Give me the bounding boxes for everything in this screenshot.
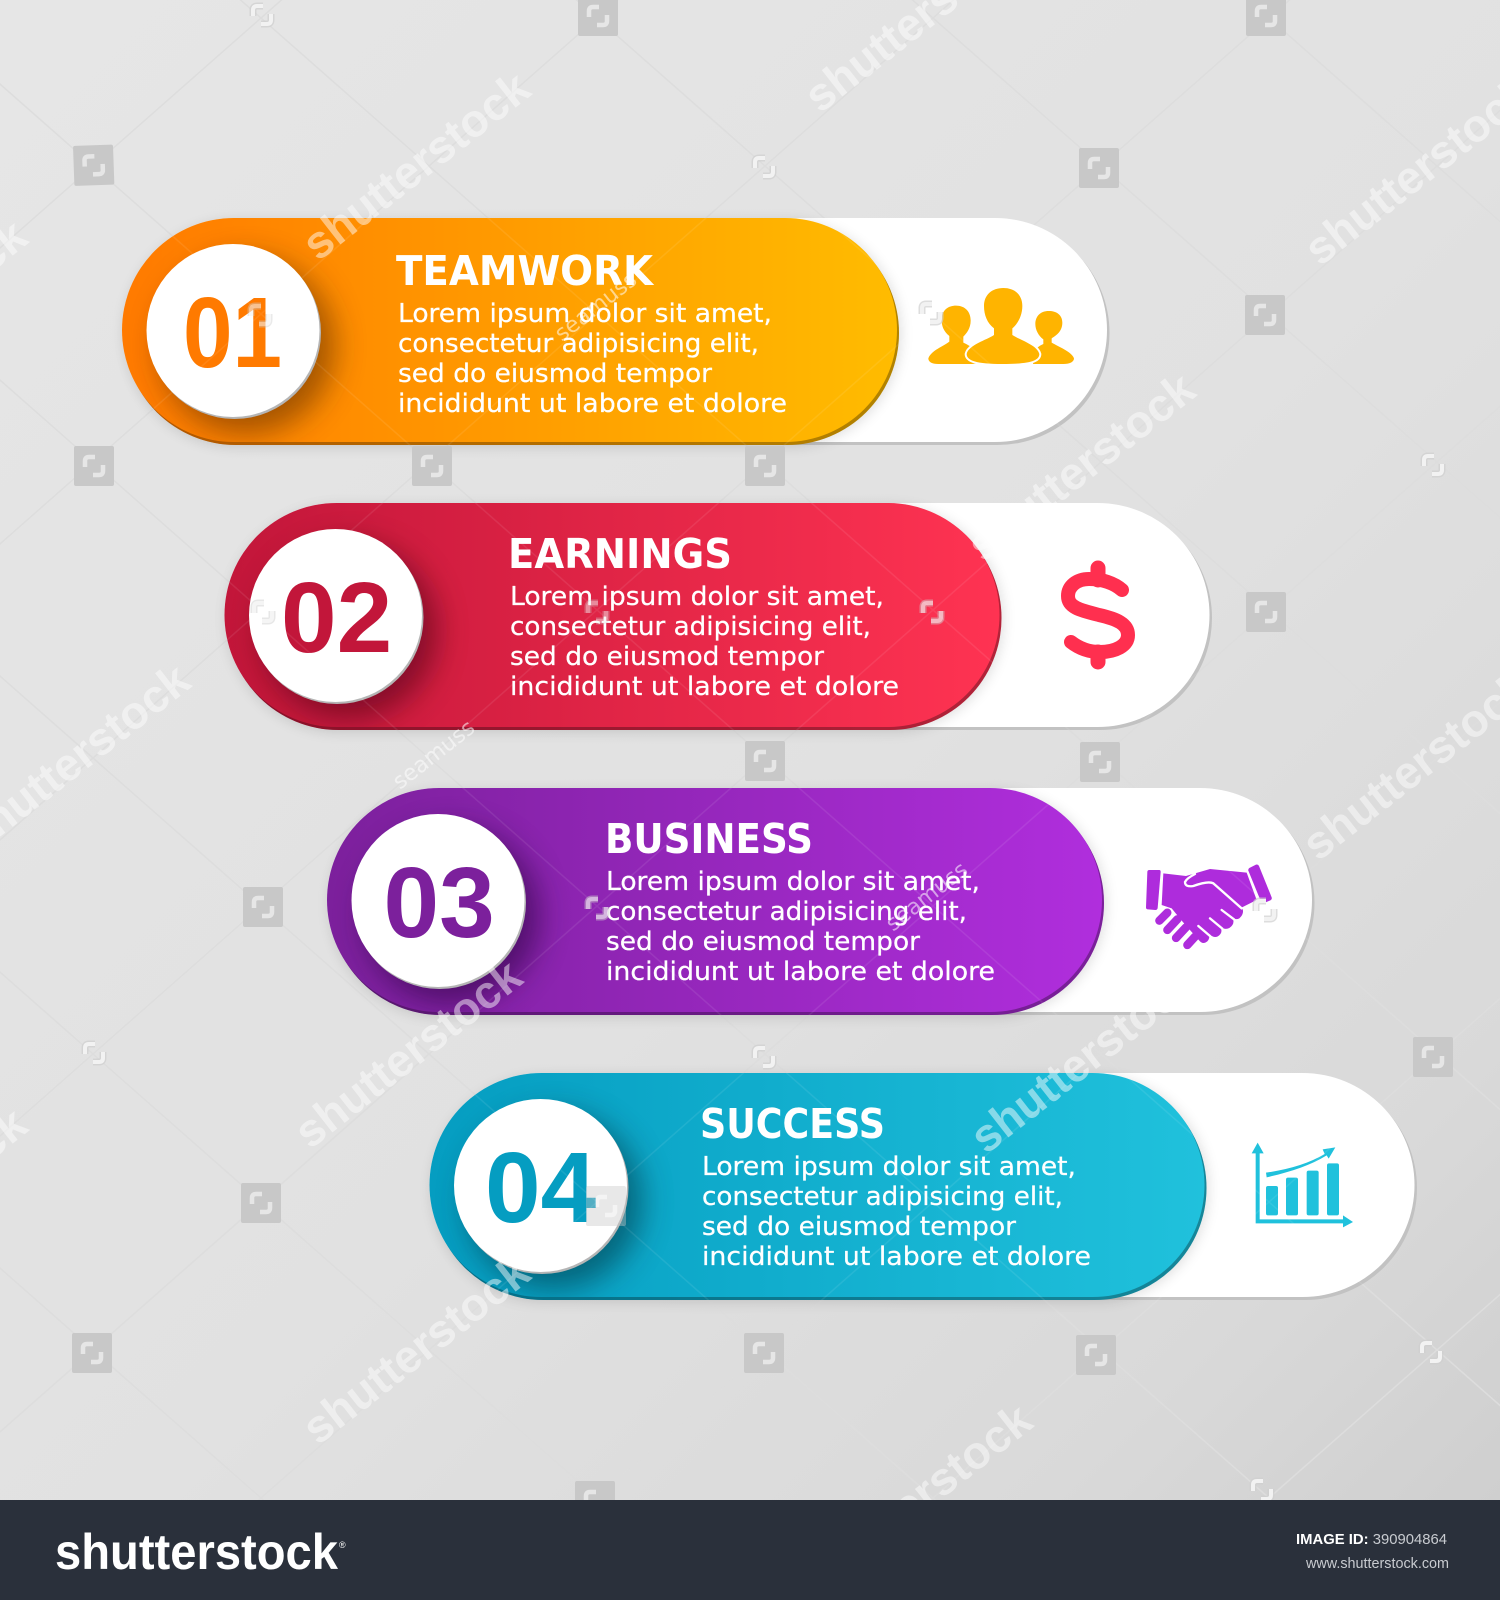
body text 4: incididunt ut labore et dolore: [702, 1242, 1091, 1272]
white pill 4: [430, 1073, 1417, 1300]
image id: IMAGE ID: 390904864: [1296, 1531, 1447, 1548]
body text 3: Lorem ipsum dolor sit amet,: [606, 867, 980, 897]
body text 4: Lorem ipsum dolor sit amet,: [702, 1152, 1076, 1182]
number badge 3: [352, 814, 526, 989]
number badge 1: 01: [183, 277, 282, 389]
coloured pill 1: [122, 218, 900, 446]
body text 3: [606, 867, 995, 987]
body text 1: Lorem ipsum dolor sit amet,: [398, 299, 772, 329]
number badge 3: 03: [384, 847, 495, 959]
icon: team: [928, 288, 1074, 364]
number badge 2: 02: [281, 562, 392, 674]
circle shadow 2: [262, 543, 438, 719]
body text 2: [510, 582, 899, 702]
panel: step 4 success: [430, 1073, 1417, 1301]
body text 1: incididunt ut labore et dolore: [398, 389, 787, 419]
watermark text: shutterstock: [284, 949, 532, 1158]
heading: business: BUSINESS: [605, 815, 813, 863]
body text 4: consectetur adipisicing elit,: [702, 1182, 1063, 1212]
heading: teamwork: TEAMWORK: [396, 247, 655, 295]
watermark text: seamuss: [881, 857, 973, 937]
number badge 4: [454, 1099, 628, 1274]
website: www.shutterstock.com: [1305, 1555, 1449, 1572]
circle shadow 1: [159, 258, 335, 434]
watermark text: seamuss: [550, 267, 642, 347]
body text 1: [398, 299, 787, 419]
body text 4: sed do eiusmod tempor: [702, 1212, 1017, 1242]
coloured pill 2: [224, 503, 1002, 731]
circle shadow 3: [364, 828, 540, 1004]
body text 1: consectetur adipisicing elit,: [398, 329, 759, 359]
icon: growth chart: [1252, 1143, 1353, 1227]
watermark text: shutterstock: [794, 1393, 1042, 1600]
body text 3: consectetur adipisicing elit,: [606, 897, 967, 927]
panel: step 3 business: [327, 788, 1314, 1016]
body text 2: consectetur adipisicing elit,: [510, 612, 871, 642]
white pill 2: [224, 503, 1212, 730]
watermark text: seamuss: [388, 715, 480, 795]
watermark text: shutterstock: [960, 954, 1208, 1163]
watermark text: shutterstock: [292, 61, 540, 270]
panel: step 2 earnings: [224, 503, 1212, 731]
number badge 2: [249, 529, 424, 704]
body text 4: [702, 1152, 1091, 1272]
heading: earnings: EARNINGS: [508, 530, 732, 578]
icon: dollar: [1068, 568, 1128, 662]
footer logo: shutterstock: [55, 1524, 338, 1580]
circle shadow 4: [466, 1113, 642, 1289]
watermark text: shutterstock: [957, 362, 1205, 571]
number badge 4: 04: [485, 1132, 597, 1244]
icon: handshake: [1146, 864, 1272, 945]
body text 2: incididunt ut labore et dolore: [510, 672, 899, 702]
panel: step 1 teamwork: [122, 218, 1110, 446]
coloured pill 4: [430, 1073, 1208, 1301]
heading: success: SUCCESS: [700, 1100, 885, 1148]
body text 3: sed do eiusmod tempor: [606, 927, 921, 957]
body text 1: sed do eiusmod tempor: [398, 359, 713, 389]
white pill 3: [327, 788, 1314, 1015]
number badge 1: [146, 244, 321, 419]
footer bar: [0, 1500, 1500, 1600]
body text 2: sed do eiusmod tempor: [510, 642, 825, 672]
coloured pill 3: [327, 788, 1105, 1016]
white pill 1: [122, 218, 1110, 445]
body text 3: incididunt ut labore et dolore: [606, 957, 995, 987]
registered mark: ®: [339, 1540, 346, 1550]
watermark text: shutterstock: [292, 1245, 540, 1454]
body text 2: Lorem ipsum dolor sit amet,: [510, 582, 884, 612]
